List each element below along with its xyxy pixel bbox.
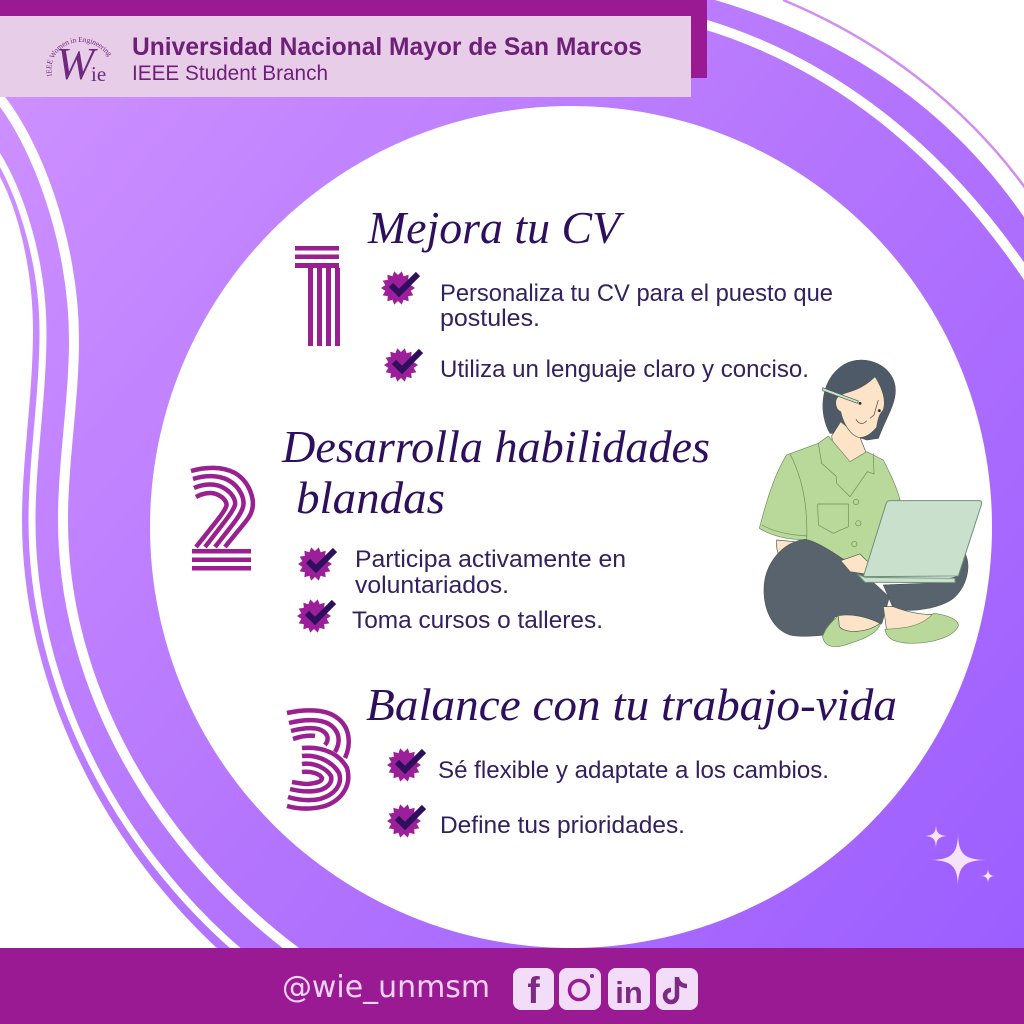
text 1a: postules. [440,305,540,332]
number 2 [191,468,253,570]
icon: instagram [559,968,601,1010]
text 2a: voluntariados. [355,572,509,599]
left leg [764,539,889,636]
badge 1a [381,271,418,305]
text 1a: Personaliza tu CV para el puesto que [440,280,833,307]
white central circle [150,106,992,948]
right leg [883,553,968,610]
text 3b: Define tus prioridades. [440,812,685,839]
facial features [856,400,880,423]
header title: Universidad Nacional Mayor de San Marcos [132,33,642,61]
text 3a: Sé flexible y adaptate a los cambios. [438,757,829,784]
pencil behind ear [823,388,858,403]
badge 1b [384,348,421,382]
feet and shoes [823,607,959,647]
WIE logo: IEEE Women in Engineering [46,37,112,77]
heading: Desarrolla habilidades blandas: blandas [296,472,445,523]
text 1b: Utiliza un lenguaje claro y conciso. [440,356,809,383]
badge 2a [298,547,335,581]
shirt details [762,443,874,547]
text 2a: Participa activamente en [355,546,626,573]
hair back [823,360,895,440]
heading: Desarrolla habilidades blandas [281,421,710,523]
laptop [857,501,982,583]
heading: Mejora tu CV: Mejora tu CV [367,202,625,253]
header band [0,0,707,97]
shirt [759,436,900,563]
neck [832,422,867,465]
top right curves [700,0,1024,280]
number 3 [287,710,349,809]
icon: facebook: f [527,970,540,1011]
text 1a [440,280,833,332]
text 2a [355,546,626,599]
badge 3b [387,804,424,838]
illustration: woman with laptop [759,360,982,647]
number 1 [295,246,340,346]
text 2b: Toma cursos o talleres. [352,607,603,634]
icon: facebook [513,968,554,1011]
badge 3a [387,748,424,782]
WIE logo: W [56,38,98,89]
WIE logo: ie [91,62,106,86]
icon: linkedin: in [615,975,643,1010]
heading: Balance con tu trabajo-vida: Balance con tu trabajo-vida [366,679,897,730]
face [836,377,884,437]
icon: tiktok [656,968,698,1010]
arm behind [776,540,795,557]
footer handle: @wie_unmsm [282,970,490,1005]
left white curves [0,95,296,954]
sparkles [923,824,996,888]
icon: linkedin [608,968,650,1010]
footer band [0,948,1024,1024]
badge 2b [297,599,334,633]
header subtitle: IEEE Student Branch [132,62,328,85]
hand [841,554,869,574]
heading: Desarrolla habilidades blandas: Desarrolla habilidades [281,421,710,472]
